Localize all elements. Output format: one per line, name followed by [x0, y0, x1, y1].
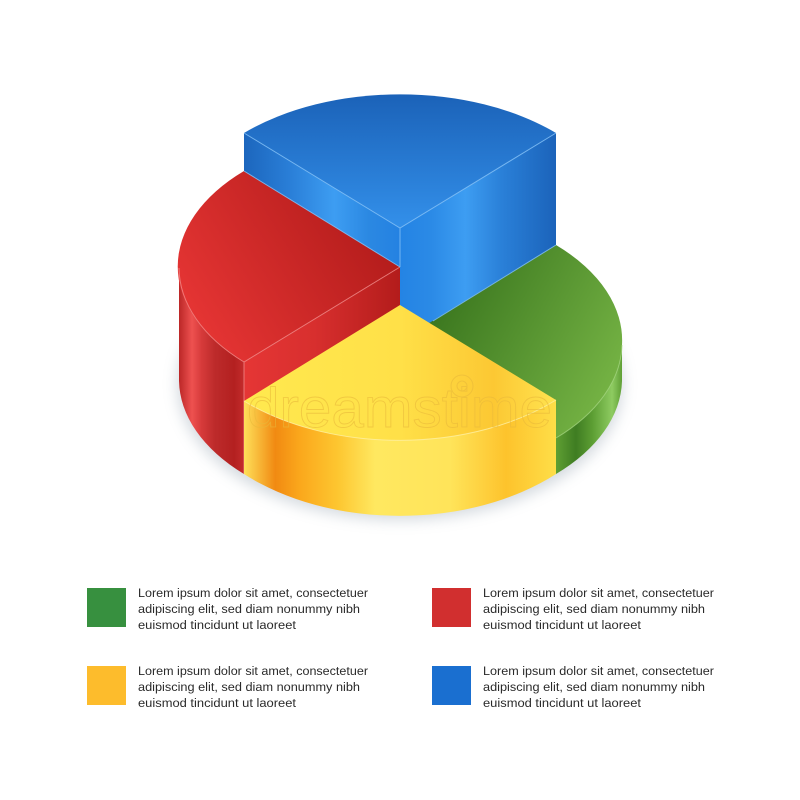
legend item: red	[432, 586, 714, 632]
watermark: dreamstime	[247, 376, 552, 439]
green slice	[400, 245, 622, 474]
yellow slice	[244, 305, 556, 516]
drop shadow under pie	[177, 248, 623, 520]
legend item: red: euismod tincidunt ut laoreet	[483, 618, 642, 632]
legend item: yellow	[87, 664, 368, 710]
legend item: red: adipiscing elit, sed diam nonummy nibh	[483, 602, 705, 616]
pie chart	[178, 94, 622, 516]
legend item: blue: adipiscing elit, sed diam nonummy nibh	[483, 680, 705, 694]
legend item: green: Lorem ipsum dolor sit amet, consectetuer	[138, 586, 368, 600]
blue slice	[244, 94, 556, 341]
legend item: green: adipiscing elit, sed diam nonummy nibh	[138, 602, 360, 616]
red slice	[178, 171, 400, 474]
legend item: blue: euismod tincidunt ut laoreet	[483, 696, 642, 710]
legend	[87, 586, 714, 710]
legend item: yellow: euismod tincidunt ut laoreet	[138, 696, 297, 710]
legend item: green	[87, 586, 368, 632]
legend item: red: Lorem ipsum dolor sit amet, consectetuer	[483, 586, 714, 600]
legend item: blue: Lorem ipsum dolor sit amet, consectetuer	[483, 664, 714, 678]
legend item: yellow: Lorem ipsum dolor sit amet, consectetuer	[138, 664, 368, 678]
legend item: green: euismod tincidunt ut laoreet	[138, 618, 297, 632]
legend item: yellow: adipiscing elit, sed diam nonummy nibh	[138, 680, 360, 694]
legend item: blue	[432, 664, 714, 710]
